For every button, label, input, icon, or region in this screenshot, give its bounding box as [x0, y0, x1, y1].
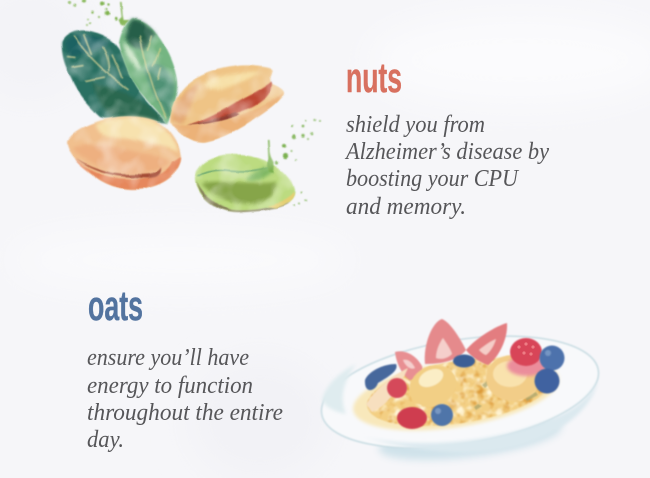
banana slices [366, 355, 540, 414]
text block: oats description: ensure you’ll have [87, 345, 249, 371]
text block: nuts description: boosting your CPU [346, 166, 520, 192]
illustration: oat bowl with berries [314, 319, 606, 468]
text block: oats description: day. [87, 427, 124, 453]
icon: left pistachio [67, 116, 181, 189]
blueberries [365, 346, 564, 426]
illustration: pistachios and leaves [62, 0, 321, 212]
bowl shadow [376, 408, 564, 468]
plate rim tint [322, 364, 356, 414]
red berries [387, 378, 427, 429]
text block: nuts description: shield you from [346, 112, 485, 138]
icon: green paint splatter right [267, 119, 321, 207]
heading: oats: oats [88, 282, 143, 329]
icon: dark leaf [62, 30, 167, 123]
plate lower tint [360, 380, 598, 453]
raspberry [507, 338, 547, 376]
text block: oats description: throughout the entire [87, 400, 283, 426]
heading: nuts: nuts [346, 54, 402, 101]
text block: nuts description: and memory. [346, 194, 466, 220]
icon: green paint splatter top [68, 0, 130, 26]
text block: oats description: energy to function [87, 373, 253, 399]
icon: light leaf [119, 18, 177, 124]
text block: oats description [87, 345, 283, 453]
plate [314, 319, 606, 465]
oats mound [348, 345, 564, 443]
icon: green pistachio kernel [195, 154, 295, 212]
text block: nuts description [344, 112, 549, 220]
icon: right pistachio [170, 65, 284, 142]
strawberry slices [395, 319, 507, 380]
text block: nuts description: Alzheimer’s disease by [344, 139, 549, 165]
